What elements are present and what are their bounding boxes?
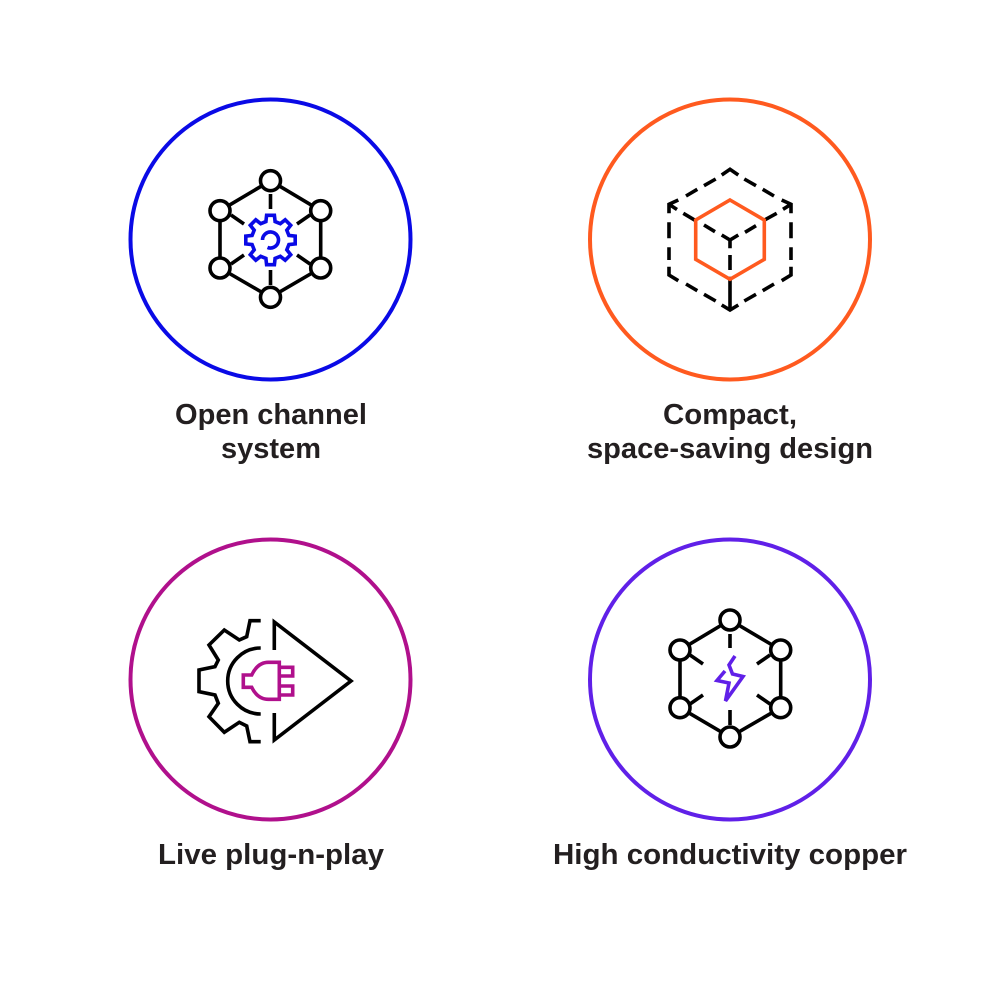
- ring: orange circle: [590, 100, 870, 380]
- icon: dashed cube: [669, 169, 791, 310]
- ring: blue circle: [130, 100, 410, 380]
- ring: magenta circle: [130, 540, 410, 820]
- panel: open channel system: [130, 100, 410, 465]
- label: compact design: Compact,: [663, 399, 797, 431]
- panel: high conductivity copper: [553, 540, 907, 871]
- ring: purple circle: [590, 540, 870, 820]
- label: compact design: space-saving design: [587, 433, 873, 465]
- label: high conductivity copper: High conductivity copper: [553, 839, 907, 871]
- icon: network with bolt: [670, 610, 791, 747]
- orange hexagon: [696, 200, 764, 279]
- icon: network with gear: [210, 171, 331, 307]
- panel: compact design: [587, 100, 873, 465]
- icon: blue gear: [246, 215, 295, 265]
- icon: gear, triangle and plug: [199, 621, 351, 742]
- label: open channel system: [175, 399, 367, 465]
- magenta plug: [243, 662, 293, 699]
- label: open channel system: Open channel: [175, 399, 367, 431]
- label: open channel system: system: [221, 433, 321, 465]
- label: compact design: [587, 399, 873, 465]
- label: live plug-n-play: Live plug-n-play: [158, 839, 384, 871]
- purple bolt: [717, 656, 743, 701]
- panel: live plug-n-play: [130, 540, 410, 871]
